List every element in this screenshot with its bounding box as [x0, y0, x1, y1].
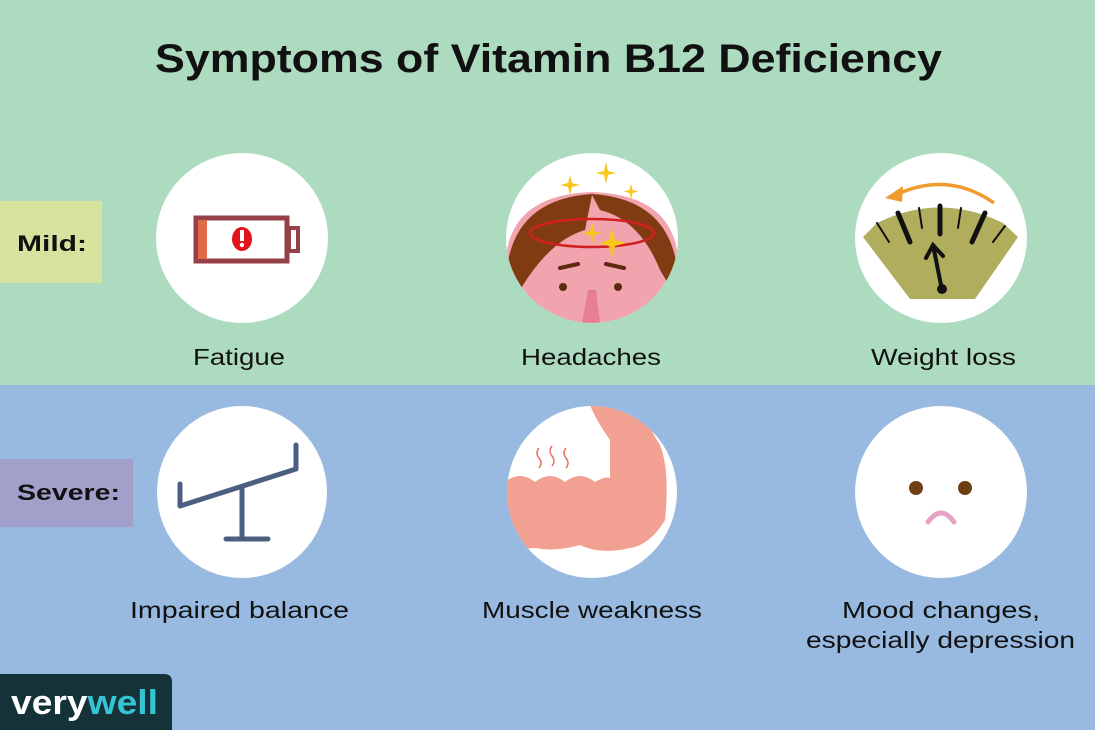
text: muscle weakness: Muscle weakness — [482, 597, 702, 623]
label: mild — [0, 201, 102, 283]
logo: verywell — [0, 674, 172, 730]
text: mood changes: Mood changes, — [842, 597, 1040, 623]
panel: severe background — [0, 385, 1095, 730]
text: impaired balance: Impaired balance — [130, 597, 349, 623]
title: Symptoms of Vitamin B12 Deficiency — [155, 37, 943, 81]
icon: seesaw balance — [157, 406, 327, 578]
text: headaches: Headaches — [521, 344, 661, 370]
logo: verywell: verywell — [11, 684, 158, 722]
label: mild: Mild: — [17, 231, 87, 256]
text: fatigue: Fatigue — [193, 344, 285, 370]
text: mood changes: especially depression — [806, 627, 1075, 653]
text: weight loss: Weight loss — [871, 344, 1016, 370]
icon: weight scale — [855, 153, 1027, 323]
icon: sad face — [855, 406, 1027, 578]
label: severe — [0, 459, 133, 527]
label: severe: Severe: — [17, 480, 120, 505]
icon: fatigue battery — [156, 153, 328, 323]
icon: muscle arm — [505, 405, 677, 578]
panel: mild background — [0, 0, 1095, 385]
icon: headaches — [506, 153, 678, 330]
